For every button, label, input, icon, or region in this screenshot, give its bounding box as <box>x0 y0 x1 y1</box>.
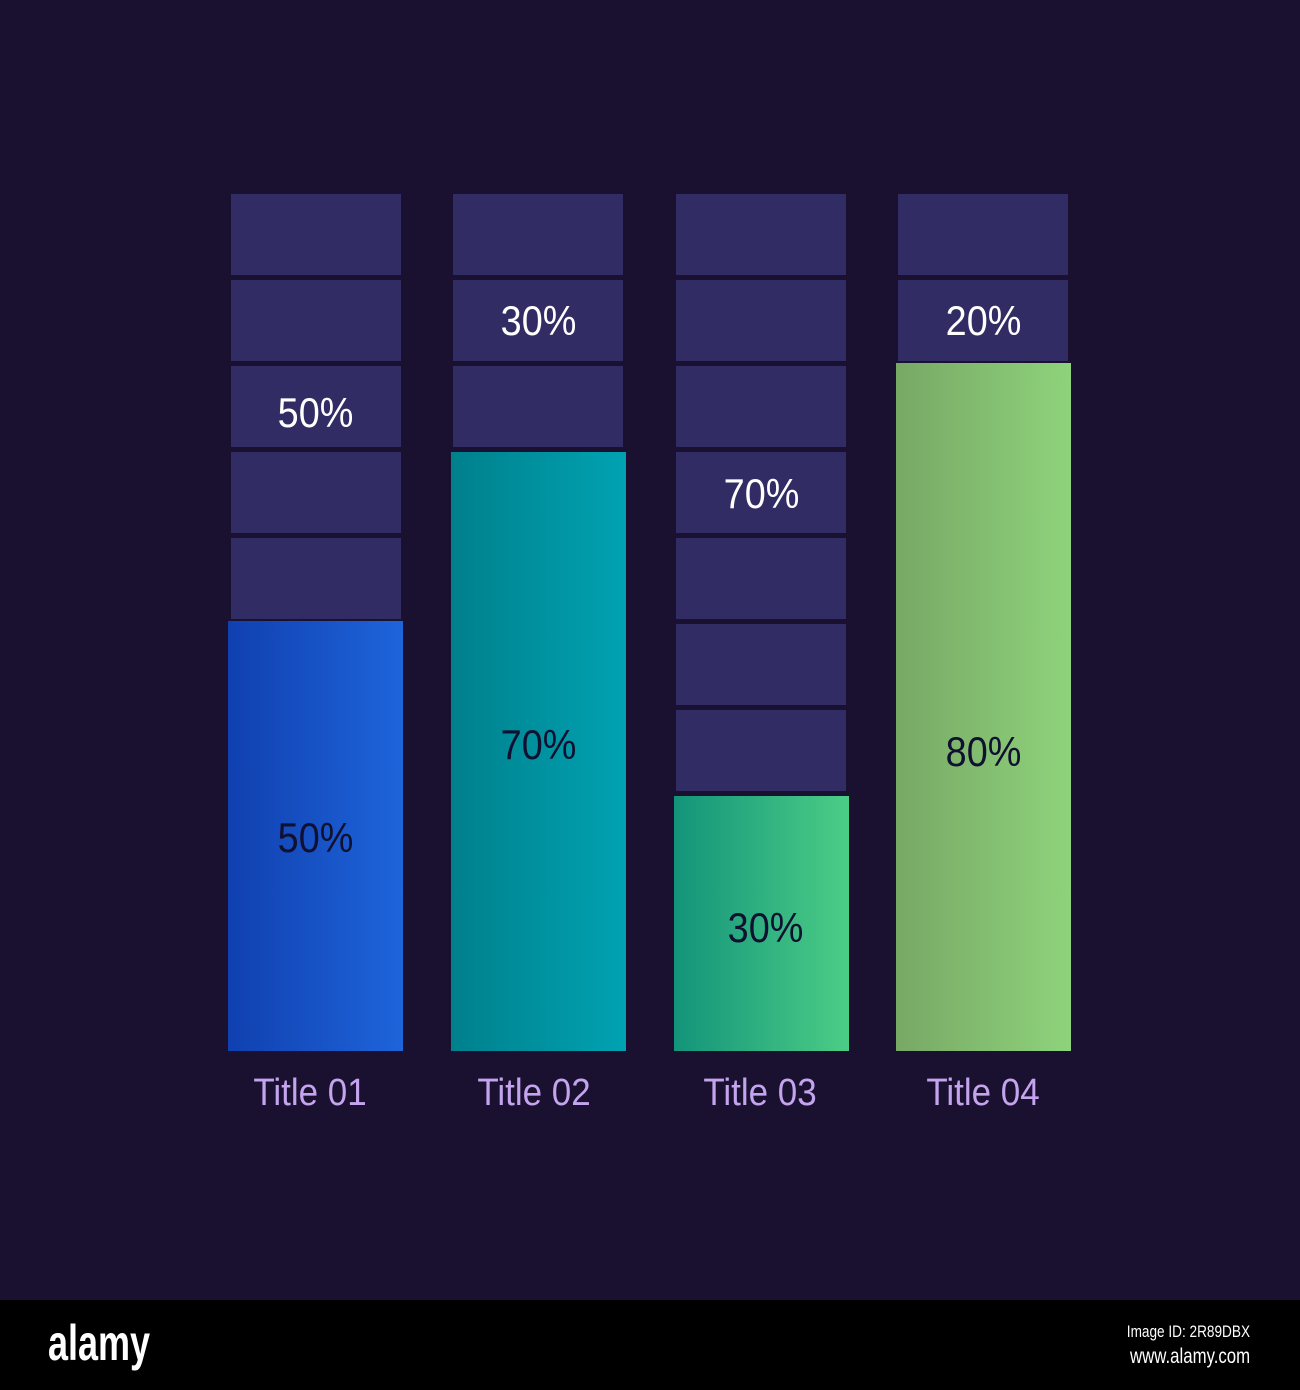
title 04: Title 04 <box>926 1072 1040 1114</box>
label: bar 30%: 30% <box>728 904 803 951</box>
column 1 <box>228 194 403 1051</box>
bar: 70% <box>451 452 626 1051</box>
title 03: Title 03 <box>703 1072 817 1114</box>
column 2 <box>451 194 626 1051</box>
label: bar 50%: 50% <box>278 814 353 861</box>
label: remaining 50%: 50% <box>278 389 353 436</box>
bar: 50% <box>228 621 403 1051</box>
bar: 80% <box>896 363 1071 1051</box>
footer logo: alamy <box>48 1315 150 1371</box>
label: bar 70%: 70% <box>501 721 576 768</box>
column 4 <box>896 194 1071 1051</box>
bar: 30% <box>674 796 849 1051</box>
label: remaining 20%: 20% <box>946 297 1021 344</box>
column 3 <box>674 194 849 1051</box>
footer url: www.alamy.com <box>1130 1345 1250 1368</box>
label: remaining 70%: 70% <box>724 470 799 517</box>
title 02: Title 02 <box>477 1072 591 1114</box>
footer id: Image ID: 2R89DBX <box>1127 1322 1250 1341</box>
title 01: Title 01 <box>253 1072 367 1114</box>
label: bar 80%: 80% <box>946 728 1021 775</box>
label: remaining 30%: 30% <box>501 297 576 344</box>
footer bar <box>0 1300 1300 1390</box>
